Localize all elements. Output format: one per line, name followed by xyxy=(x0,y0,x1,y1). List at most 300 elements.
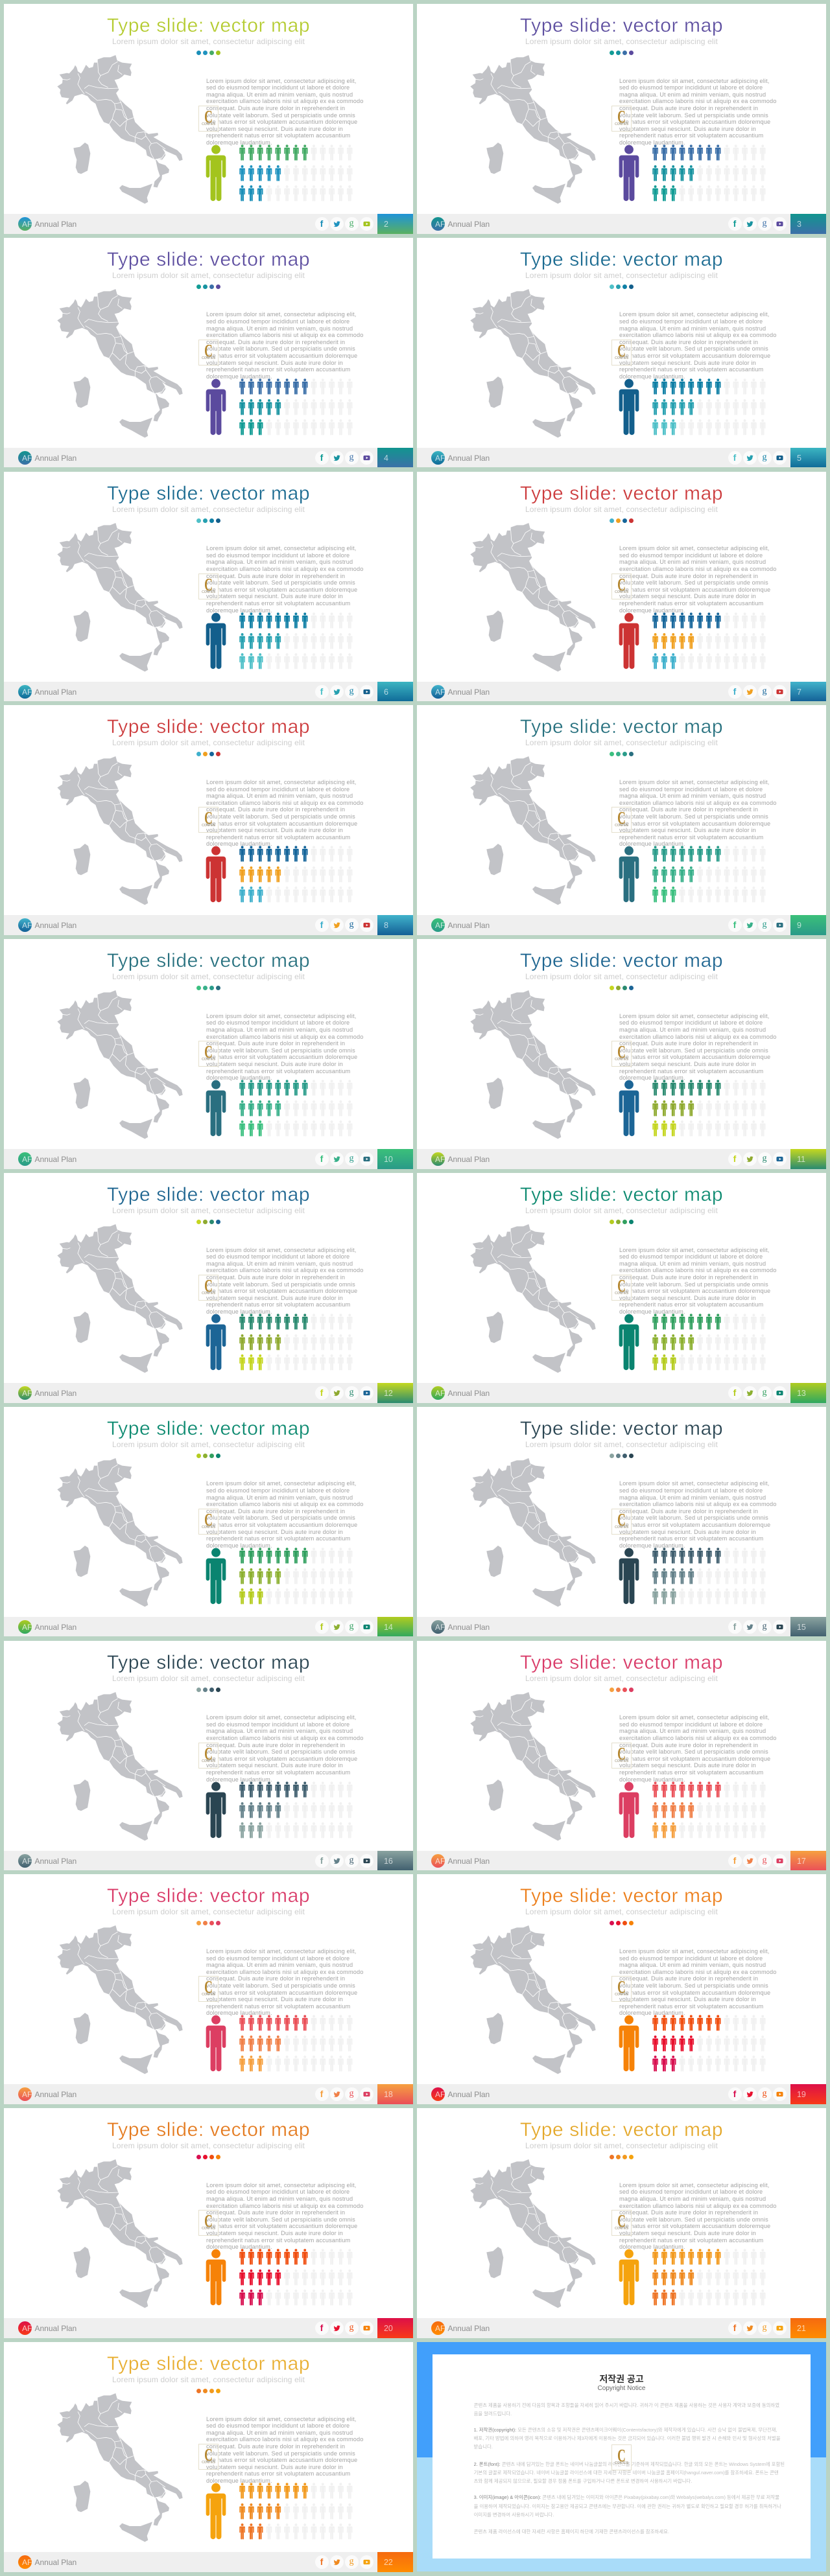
body text xyxy=(206,1247,364,1316)
footer bar: Annual Plan xyxy=(447,1155,490,1164)
copyright paragraph: 받습니다. xyxy=(474,2444,493,2450)
body text: sed do eiusmod tempor incididunt ut labore et dolore xyxy=(619,2188,763,2195)
footer bar xyxy=(417,214,826,234)
image and icon paragraph xyxy=(474,2493,769,2519)
footer bar: AF xyxy=(435,688,445,697)
body text xyxy=(206,779,364,847)
body text xyxy=(619,1013,777,1082)
slide: page 7 xyxy=(417,472,826,701)
body text: exercitation ullamco laboris nisi ut aliquip ex ea commodo xyxy=(206,98,364,104)
footer bar: g xyxy=(763,1855,766,1865)
image and icon paragraph: 을 이용하여 제작되었습니다. 이미지는 참고용만 제공되고 콘텐츠에는 무관합니다. 이에 관한 권리는 귀하가 별도로 확인하고 필요할 경우 허가를 취득하거나 xyxy=(474,2503,781,2509)
body text: exercitation ullamco laboris nisi ut aliquip ex ea commodo xyxy=(619,800,777,806)
subtitle: Lorem ipsum dolor sit amet, consectetur adipiscing elit xyxy=(112,1907,305,1916)
person pictogram rows xyxy=(652,2015,776,2073)
body text: reprehenderit natus error sit voluptatem accusantium xyxy=(619,1301,763,1308)
body text: voluptatem sequi nesciunt. Duis aute irure dolor in xyxy=(206,126,343,132)
footer bar xyxy=(4,1851,413,1871)
subtitle: Lorem ipsum dolor sit amet, consectetur adipiscing elit xyxy=(525,37,718,46)
colour dots xyxy=(610,986,634,990)
body text: exercitation ullamco laboris nisi ut aliquip ex ea commodo xyxy=(206,1267,364,1273)
body text: sed do eiusmod tempor incididunt ut labore et dolore xyxy=(619,318,763,325)
body text: magna aliqua. Ut enim ad minim veniam, quis nostrud xyxy=(619,793,766,799)
body text: sed do eiusmod tempor incididunt ut labore et dolore xyxy=(206,1253,350,1260)
body text: exercitation ullamco laboris nisi ut aliquip ex ea commodo xyxy=(206,2203,364,2209)
body text: exercitation ullamco laboris nisi ut aliquip ex ea commodo xyxy=(619,1034,777,1040)
title: Type slide: vector map xyxy=(107,1885,310,1907)
body text: Lorem ipsum dolor sit amet, consectetur adipiscing elit, xyxy=(206,779,357,785)
person pictogram rows xyxy=(239,2483,362,2541)
body text: exercitation ullamco laboris nisi ut aliquip ex ea commodo xyxy=(206,800,364,806)
footer bar: f xyxy=(320,2323,323,2333)
body text: consequat. Duis aute irure dolor in reprehenderit in xyxy=(206,2209,345,2216)
map of Italy xyxy=(57,55,183,203)
body text xyxy=(619,78,777,146)
footer bar: Annual Plan xyxy=(35,2090,77,2099)
footer bar: f xyxy=(733,1387,736,1398)
subtitle: Lorem ipsum dolor sit amet, consectetur adipiscing elit xyxy=(112,972,305,981)
body text xyxy=(206,311,364,380)
watermark xyxy=(198,1509,219,1535)
large person icon xyxy=(206,1314,226,1371)
body text: consequat. Duis aute irure dolor in reprehenderit in xyxy=(206,806,345,813)
footer bar: Annual Plan xyxy=(447,2324,490,2333)
colour dots xyxy=(196,518,220,523)
subtitle: Lorem ipsum dolor sit amet, consectetur adipiscing elit xyxy=(525,1206,718,1215)
subtitle: Lorem ipsum dolor sit amet, consectetur adipiscing elit xyxy=(112,271,305,280)
title: Type slide: vector map xyxy=(520,1885,723,1907)
footer bar: Annual Plan xyxy=(35,921,77,930)
body text: Lorem ipsum dolor sit amet, consectetur adipiscing elit, xyxy=(619,1480,770,1487)
watermark: C xyxy=(617,1977,626,1997)
intro paragraph: 콘텐츠 제품을 사용하기 전에 다음의 항목과 조항들을 자세히 읽어 주시기 바랍니다. 귀하가 이 콘텐츠 제품을 사용하는 것은 사용자 계약과 보증에 동의하였 xyxy=(474,2402,779,2408)
body text: sed do eiusmod tempor incididunt ut labore et dolore xyxy=(206,1955,350,1962)
footer bar: 22 xyxy=(384,2558,393,2567)
body text: doloremque laudantium. xyxy=(206,1308,272,1315)
map of Italy xyxy=(471,55,596,203)
copyright paragraph: 배포, 기타 방법에 의하여 영리 목적으로 이용하거나 제3자에게 이용하는 것은 금지되어 있습니다. 이러한 불법 행위 발견 시 손해와 민사 및 형사상의 처벌을 xyxy=(474,2435,781,2441)
body text xyxy=(206,1480,364,1549)
colour dots xyxy=(196,2389,220,2393)
body text: voluptatem sequi nesciunt. Duis aute irure dolor in xyxy=(619,126,756,132)
colour dots xyxy=(196,51,220,55)
body text: consequat. Duis aute irure dolor in reprehenderit in xyxy=(206,105,345,111)
body text: iste natus error sit voluptatem accusantium doloremque xyxy=(619,119,770,125)
body text: voluptate velit laborum. Sed ut perspiciatis unde omnis xyxy=(206,112,355,119)
body text: doloremque laudantium. xyxy=(619,1542,685,1549)
colour dots xyxy=(196,1688,220,1692)
person pictogram rows xyxy=(652,145,765,201)
watermark: CONTES xyxy=(202,1292,215,1295)
body text: voluptatem sequi nesciunt. Duis aute irure dolor in xyxy=(619,1295,756,1301)
body text: voluptate velit laborum. Sed ut perspiciatis unde omnis xyxy=(619,1748,768,1755)
subtitle: Lorem ipsum dolor sit amet, consectetur adipiscing elit xyxy=(525,505,718,514)
body text: magna aliqua. Ut enim ad minim veniam, quis nostrud xyxy=(206,559,353,565)
watermark xyxy=(198,807,219,833)
body text: Lorem ipsum dolor sit amet, consectetur adipiscing elit, xyxy=(206,311,357,318)
body text: sed do eiusmod tempor incididunt ut labore et dolore xyxy=(206,1019,350,1026)
body text: consequat. Duis aute irure dolor in reprehenderit in xyxy=(619,1508,758,1514)
footer bar xyxy=(4,214,413,234)
body text: magna aliqua. Ut enim ad minim veniam, quis nostrud xyxy=(206,1962,353,1968)
body text: iste natus error sit voluptatem accusantium doloremque xyxy=(619,1054,770,1060)
person pictogram rows xyxy=(652,1548,776,1606)
footer bar: g xyxy=(349,218,354,228)
body text: Lorem ipsum dolor sit amet, consectetur adipiscing elit, xyxy=(619,779,770,785)
footer bar: g xyxy=(763,1621,766,1631)
footer bar xyxy=(417,448,826,468)
title: Type slide: vector map xyxy=(520,1652,723,1673)
body text: exercitation ullamco laboris nisi ut aliquip ex ea commodo xyxy=(206,1034,364,1040)
watermark: CONTES xyxy=(615,824,628,828)
footer bar xyxy=(4,2084,413,2104)
body text: iste natus error sit voluptatem accusantium doloremque xyxy=(619,1288,770,1294)
slide: page 12 xyxy=(4,1173,413,1403)
map of Italy xyxy=(452,1689,608,1851)
body text: doloremque laudantium. xyxy=(619,373,685,380)
body text xyxy=(619,545,777,614)
person pictogram rows xyxy=(239,612,353,669)
body text: reprehenderit natus error sit voluptatem accusantium xyxy=(619,132,763,139)
watermark: CONTES xyxy=(615,2227,628,2231)
footer bar: 13 xyxy=(797,1389,806,1398)
footer bar: g xyxy=(763,686,766,696)
body text: Lorem ipsum dolor sit amet, consectetur adipiscing elit, xyxy=(206,1714,357,1721)
body text: iste natus error sit voluptatem accusantium doloremque xyxy=(206,1756,357,1762)
watermark xyxy=(198,1743,219,1769)
body text: voluptate velit laborum. Sed ut perspiciatis unde omnis xyxy=(206,1047,355,1054)
body text xyxy=(206,78,364,146)
subtitle: Lorem ipsum dolor sit amet, consectetur adipiscing elit xyxy=(112,505,305,514)
footer bar: Annual Plan xyxy=(35,1389,77,1398)
body text: consequat. Duis aute irure dolor in reprehenderit in xyxy=(619,105,758,111)
colour dots xyxy=(196,1220,220,1224)
body text: iste natus error sit voluptatem accusantium doloremque xyxy=(206,1990,357,1996)
font paragraph: 기본의 글꼴로 제작되었습니다. 네이버 나눔글꼴 라이선스에 대한 자세한 사항은 네이버 나눔글꼴 홈페이지(hangul.naver.com)를 참조하세요. 폰트는 콘텐 xyxy=(474,2470,779,2476)
body text: magna aliqua. Ut enim ad minim veniam, quis nostrud xyxy=(206,2430,353,2436)
body text: Lorem ipsum dolor sit amet, consectetur adipiscing elit, xyxy=(206,1948,357,1955)
colour dots xyxy=(610,1688,634,1692)
body text: reprehenderit natus error sit voluptatem accusantium xyxy=(206,1535,350,1542)
watermark: C xyxy=(617,107,626,126)
footer bar: AF xyxy=(435,2324,445,2333)
body text xyxy=(619,1247,777,1316)
body text: doloremque laudantium. xyxy=(619,841,685,847)
body text: reprehenderit natus error sit voluptatem accusantium xyxy=(619,1068,763,1074)
body text: Lorem ipsum dolor sit amet, consectetur adipiscing elit, xyxy=(619,1247,770,1253)
map of Italy xyxy=(57,756,183,905)
copyright heading: 저작권 공고 xyxy=(599,2374,644,2384)
map of Italy xyxy=(39,2390,195,2552)
footer bar: 20 xyxy=(384,2324,393,2333)
body text: magna aliqua. Ut enim ad minim veniam, quis nostrud xyxy=(619,1260,766,1267)
body text: voluptate velit laborum. Sed ut perspiciatis unde omnis xyxy=(619,1047,768,1054)
body text: Lorem ipsum dolor sit amet, consectetur adipiscing elit, xyxy=(619,1714,770,1721)
colour dots xyxy=(610,1921,634,1925)
body text: sed do eiusmod tempor incididunt ut labore et dolore xyxy=(206,318,350,325)
body text xyxy=(619,1948,777,2017)
body text: sed do eiusmod tempor incididunt ut labore et dolore xyxy=(206,786,350,793)
body text: iste natus error sit voluptatem accusantium doloremque xyxy=(206,1054,357,1060)
watermark: C xyxy=(617,1510,626,1529)
footer bar: Annual Plan xyxy=(35,454,77,463)
body text: voluptate velit laborum. Sed ut perspiciatis unde omnis xyxy=(206,813,355,820)
person pictogram rows xyxy=(652,1781,776,1840)
footer bar: g xyxy=(763,1154,766,1163)
footer bar xyxy=(417,1851,826,1871)
slide: page 5 xyxy=(417,238,826,467)
image and icon paragraph: 이미지를 변경하여 사용하시기 바랍니다. xyxy=(474,2512,554,2518)
slide: page 17 xyxy=(417,1641,826,1870)
slide: page 13 xyxy=(417,1173,826,1403)
footer bar: g xyxy=(349,1621,354,1631)
body text: Lorem ipsum dolor sit amet, consectetur adipiscing elit, xyxy=(206,1480,357,1487)
slide: page 14 xyxy=(4,1407,413,1636)
watermark: CONTES xyxy=(202,356,215,360)
large person icon xyxy=(619,1781,639,1839)
footer bar: 16 xyxy=(384,1857,393,1866)
body text: consequat. Duis aute irure dolor in reprehenderit in xyxy=(619,2209,758,2216)
body text: voluptatem sequi nesciunt. Duis aute irure dolor in xyxy=(206,1061,343,1067)
body text: Lorem ipsum dolor sit amet, consectetur adipiscing elit, xyxy=(206,2182,357,2188)
body text: voluptate velit laborum. Sed ut perspiciatis unde omnis xyxy=(619,1514,768,1521)
watermark xyxy=(611,807,632,833)
watermark xyxy=(611,1275,632,1301)
body text: consequat. Duis aute irure dolor in reprehenderit in xyxy=(619,1975,758,1982)
watermark xyxy=(198,574,219,599)
watermark: CONTES xyxy=(615,356,628,360)
map of Italy xyxy=(39,1922,195,2084)
body text: doloremque laudantium. xyxy=(619,2244,685,2250)
body text: consequat. Duis aute irure dolor in reprehenderit in xyxy=(206,1508,345,1514)
slide: page 8 xyxy=(4,705,413,935)
slide: page 10 xyxy=(4,939,413,1169)
footer bar: g xyxy=(349,1154,354,1163)
body text: iste natus error sit voluptatem accusantium doloremque xyxy=(619,2223,770,2229)
footer bar: f xyxy=(320,1387,323,1398)
watermark xyxy=(198,340,219,366)
watermark: C xyxy=(617,575,626,594)
watermark: C xyxy=(617,1042,626,1062)
body text: voluptatem sequi nesciunt. Duis aute irure dolor in xyxy=(206,2464,343,2470)
footer bar xyxy=(417,682,826,702)
body text: sed do eiusmod tempor incididunt ut labore et dolore xyxy=(206,2422,350,2429)
title: Type slide: vector map xyxy=(107,15,310,36)
footer bar: 4 xyxy=(384,454,388,463)
body text: voluptate velit laborum. Sed ut perspiciatis unde omnis xyxy=(206,1281,355,1288)
body text: voluptate velit laborum. Sed ut perspiciatis unde omnis xyxy=(206,345,355,352)
footer bar: f xyxy=(733,1855,736,1866)
body text: exercitation ullamco laboris nisi ut aliquip ex ea commodo xyxy=(619,1735,777,1741)
footer bar: 21 xyxy=(797,2324,806,2333)
footer bar xyxy=(4,448,413,468)
footer bar: g xyxy=(763,1387,766,1397)
footer bar: f xyxy=(320,2089,323,2099)
slide: page 9 xyxy=(417,705,826,935)
footer bar: AF xyxy=(435,1857,445,1866)
subtitle: Lorem ipsum dolor sit amet, consectetur adipiscing elit xyxy=(525,1907,718,1916)
slide: page 19 xyxy=(417,1874,826,2104)
colour dots xyxy=(196,284,220,289)
body text xyxy=(206,1714,364,1783)
body text: magna aliqua. Ut enim ad minim veniam, quis nostrud xyxy=(619,325,766,332)
map of Italy xyxy=(471,756,596,905)
body text: magna aliqua. Ut enim ad minim veniam, quis nostrud xyxy=(206,1728,353,1734)
colour dots xyxy=(610,752,634,756)
watermark: CONTES xyxy=(202,1993,215,1997)
large person icon xyxy=(619,846,639,902)
body text: Lorem ipsum dolor sit amet, consectetur adipiscing elit, xyxy=(619,1013,770,1019)
body text: consequat. Duis aute irure dolor in reprehenderit in xyxy=(619,1274,758,1281)
body text: voluptate velit laborum. Sed ut perspiciatis unde omnis xyxy=(619,345,768,352)
title: Type slide: vector map xyxy=(520,2119,723,2141)
body text: sed do eiusmod tempor incididunt ut labore et dolore xyxy=(619,786,763,793)
large person icon xyxy=(206,145,226,201)
footer bar: 11 xyxy=(797,1155,805,1164)
watermark: CONTES xyxy=(202,1526,215,1529)
large person icon xyxy=(206,846,226,902)
footer bar: AF xyxy=(435,1623,445,1632)
watermark: CONTES xyxy=(202,2227,215,2231)
subtitle: Lorem ipsum dolor sit amet, consectetur adipiscing elit xyxy=(112,738,305,747)
footer bar: AF xyxy=(22,1389,32,1398)
footer bar: Annual Plan xyxy=(35,220,77,229)
body text: exercitation ullamco laboris nisi ut aliquip ex ea commodo xyxy=(206,1501,364,1507)
body text: voluptate velit laborum. Sed ut perspiciatis unde omnis xyxy=(206,2216,355,2223)
watermark xyxy=(198,2444,219,2470)
body text: reprehenderit natus error sit voluptatem accusantium xyxy=(206,2003,350,2010)
body text: iste natus error sit voluptatem accusantium doloremque xyxy=(619,586,770,593)
person pictogram rows xyxy=(652,1314,776,1372)
person pictogram rows xyxy=(239,1781,362,1840)
footer bar: Annual Plan xyxy=(35,1857,77,1866)
body text: voluptatem sequi nesciunt. Duis aute irure dolor in xyxy=(206,1295,343,1301)
subtitle: Lorem ipsum dolor sit amet, consectetur adipiscing elit xyxy=(525,1440,718,1449)
watermark: C xyxy=(204,1276,213,1295)
body text: reprehenderit natus error sit voluptatem accusantium xyxy=(206,1068,350,1074)
body text: consequat. Duis aute irure dolor in reprehenderit in xyxy=(619,339,758,345)
footer bar: AF xyxy=(22,688,32,697)
footer bar: Annual Plan xyxy=(447,1623,490,1632)
body text: voluptate velit laborum. Sed ut perspiciatis unde omnis xyxy=(619,112,768,119)
large person icon xyxy=(206,378,226,435)
watermark xyxy=(198,2210,219,2236)
person pictogram rows xyxy=(239,378,353,435)
footer bar: 9 xyxy=(797,921,801,930)
body text: doloremque laudantium. xyxy=(206,373,272,380)
watermark: C xyxy=(204,575,213,594)
body text: iste natus error sit voluptatem accusantium doloremque xyxy=(206,119,357,125)
footer bar: 2 xyxy=(384,220,388,229)
footer bar: AF xyxy=(22,2090,32,2099)
body text: magna aliqua. Ut enim ad minim veniam, quis nostrud xyxy=(206,1027,353,1033)
footer bar: g xyxy=(349,686,354,696)
body text xyxy=(206,1013,364,1082)
body text: voluptate velit laborum. Sed ut perspiciatis unde omnis xyxy=(619,579,768,586)
watermark: C xyxy=(204,107,213,126)
footer bar: Annual Plan xyxy=(447,921,490,930)
watermark: CONTES xyxy=(202,2461,215,2465)
body text: magna aliqua. Ut enim ad minim veniam, quis nostrud xyxy=(619,559,766,565)
watermark xyxy=(611,1743,632,1769)
footer bar: 15 xyxy=(797,1623,806,1632)
colour dots xyxy=(610,1454,634,1458)
body text: reprehenderit natus error sit voluptatem accusantium xyxy=(206,366,350,373)
footer bar xyxy=(4,915,413,935)
body text: magna aliqua. Ut enim ad minim veniam, quis nostrud xyxy=(206,2196,353,2202)
footer bar: g xyxy=(349,1387,354,1397)
watermark: C xyxy=(617,341,626,360)
slide: page 21 xyxy=(417,2108,826,2338)
large person icon xyxy=(619,1548,639,1605)
body text: voluptatem sequi nesciunt. Duis aute irure dolor in xyxy=(619,1996,756,2002)
watermark: CONTES xyxy=(202,1058,215,1062)
body text: reprehenderit natus error sit voluptatem accusantium xyxy=(206,1301,350,1308)
watermark: CONTES xyxy=(202,824,215,828)
body text: voluptate velit laborum. Sed ut perspiciatis unde omnis xyxy=(206,1514,355,1521)
body text: magna aliqua. Ut enim ad minim veniam, quis nostrud xyxy=(619,2196,766,2202)
intro paragraph xyxy=(474,2401,769,2418)
subtitle: Lorem ipsum dolor sit amet, consectetur adipiscing elit xyxy=(525,2141,718,2150)
footer bar: AF xyxy=(435,1389,445,1398)
title: Type slide: vector map xyxy=(520,249,723,270)
body text: exercitation ullamco laboris nisi ut aliquip ex ea commodo xyxy=(619,1267,777,1273)
title: Type slide: vector map xyxy=(107,2119,310,2141)
body text: doloremque laudantium. xyxy=(206,2010,272,2016)
watermark: C xyxy=(617,808,626,828)
footer bar: f xyxy=(320,686,323,697)
person pictogram rows xyxy=(652,1080,776,1138)
large person icon xyxy=(619,1314,639,1371)
footer bar xyxy=(417,1383,826,1403)
title: Type slide: vector map xyxy=(520,950,723,971)
body text: reprehenderit natus error sit voluptatem accusantium xyxy=(619,834,763,841)
footer bar: AF xyxy=(435,220,445,229)
map of Italy xyxy=(57,523,183,671)
watermark xyxy=(611,574,632,599)
body text: consequat. Duis aute irure dolor in reprehenderit in xyxy=(206,1274,345,1281)
body text: exercitation ullamco laboris nisi ut aliquip ex ea commodo xyxy=(206,1735,364,1741)
footer bar: AF xyxy=(22,2324,32,2333)
watermark: C xyxy=(204,341,213,360)
title: Type slide: vector map xyxy=(107,1652,310,1673)
watermark xyxy=(611,106,632,132)
watermark xyxy=(611,340,632,366)
body text: exercitation ullamco laboris nisi ut aliquip ex ea commodo xyxy=(206,1969,364,1975)
body text: consequat. Duis aute irure dolor in reprehenderit in xyxy=(206,1975,345,1982)
map of Italy xyxy=(39,987,195,1149)
copyright paragraph: 1. 저작권(copyright): 모든 콘텐츠의 소유 및 저작권은 콘텐츠메이크어웨이(Contentsfactory)와 제작자에게 있습니다. 사전 승낙 없이 불법복제, 무단전재, xyxy=(474,2427,777,2433)
body text: reprehenderit natus error sit voluptatem accusantium xyxy=(619,1769,763,1776)
title: Type slide: vector map xyxy=(107,1418,310,1439)
body text: iste natus error sit voluptatem accusantium doloremque xyxy=(206,586,357,593)
footer bar: AF xyxy=(22,921,32,930)
body text: voluptate velit laborum. Sed ut perspiciatis unde omnis xyxy=(206,1748,355,1755)
subtitle: Lorem ipsum dolor sit amet, consectetur adipiscing elit xyxy=(112,2375,305,2384)
body text: reprehenderit natus error sit voluptatem accusantium xyxy=(619,1535,763,1542)
footer bar xyxy=(4,1383,413,1403)
body text: magna aliqua. Ut enim ad minim veniam, quis nostrud xyxy=(206,325,353,332)
body text: Lorem ipsum dolor sit amet, consectetur adipiscing elit, xyxy=(206,2416,357,2422)
body text: magna aliqua. Ut enim ad minim veniam, quis nostrud xyxy=(206,793,353,799)
body text: voluptate velit laborum. Sed ut perspiciatis unde omnis xyxy=(619,2216,768,2223)
body text: sed do eiusmod tempor incididunt ut labore et dolore xyxy=(206,1721,350,1728)
footer bar: g xyxy=(763,2089,766,2098)
footer bar: f xyxy=(733,1621,736,1632)
footer bar xyxy=(4,1149,413,1169)
watermark: CONTES xyxy=(615,590,628,594)
footer bar: Annual Plan xyxy=(447,1857,490,1866)
